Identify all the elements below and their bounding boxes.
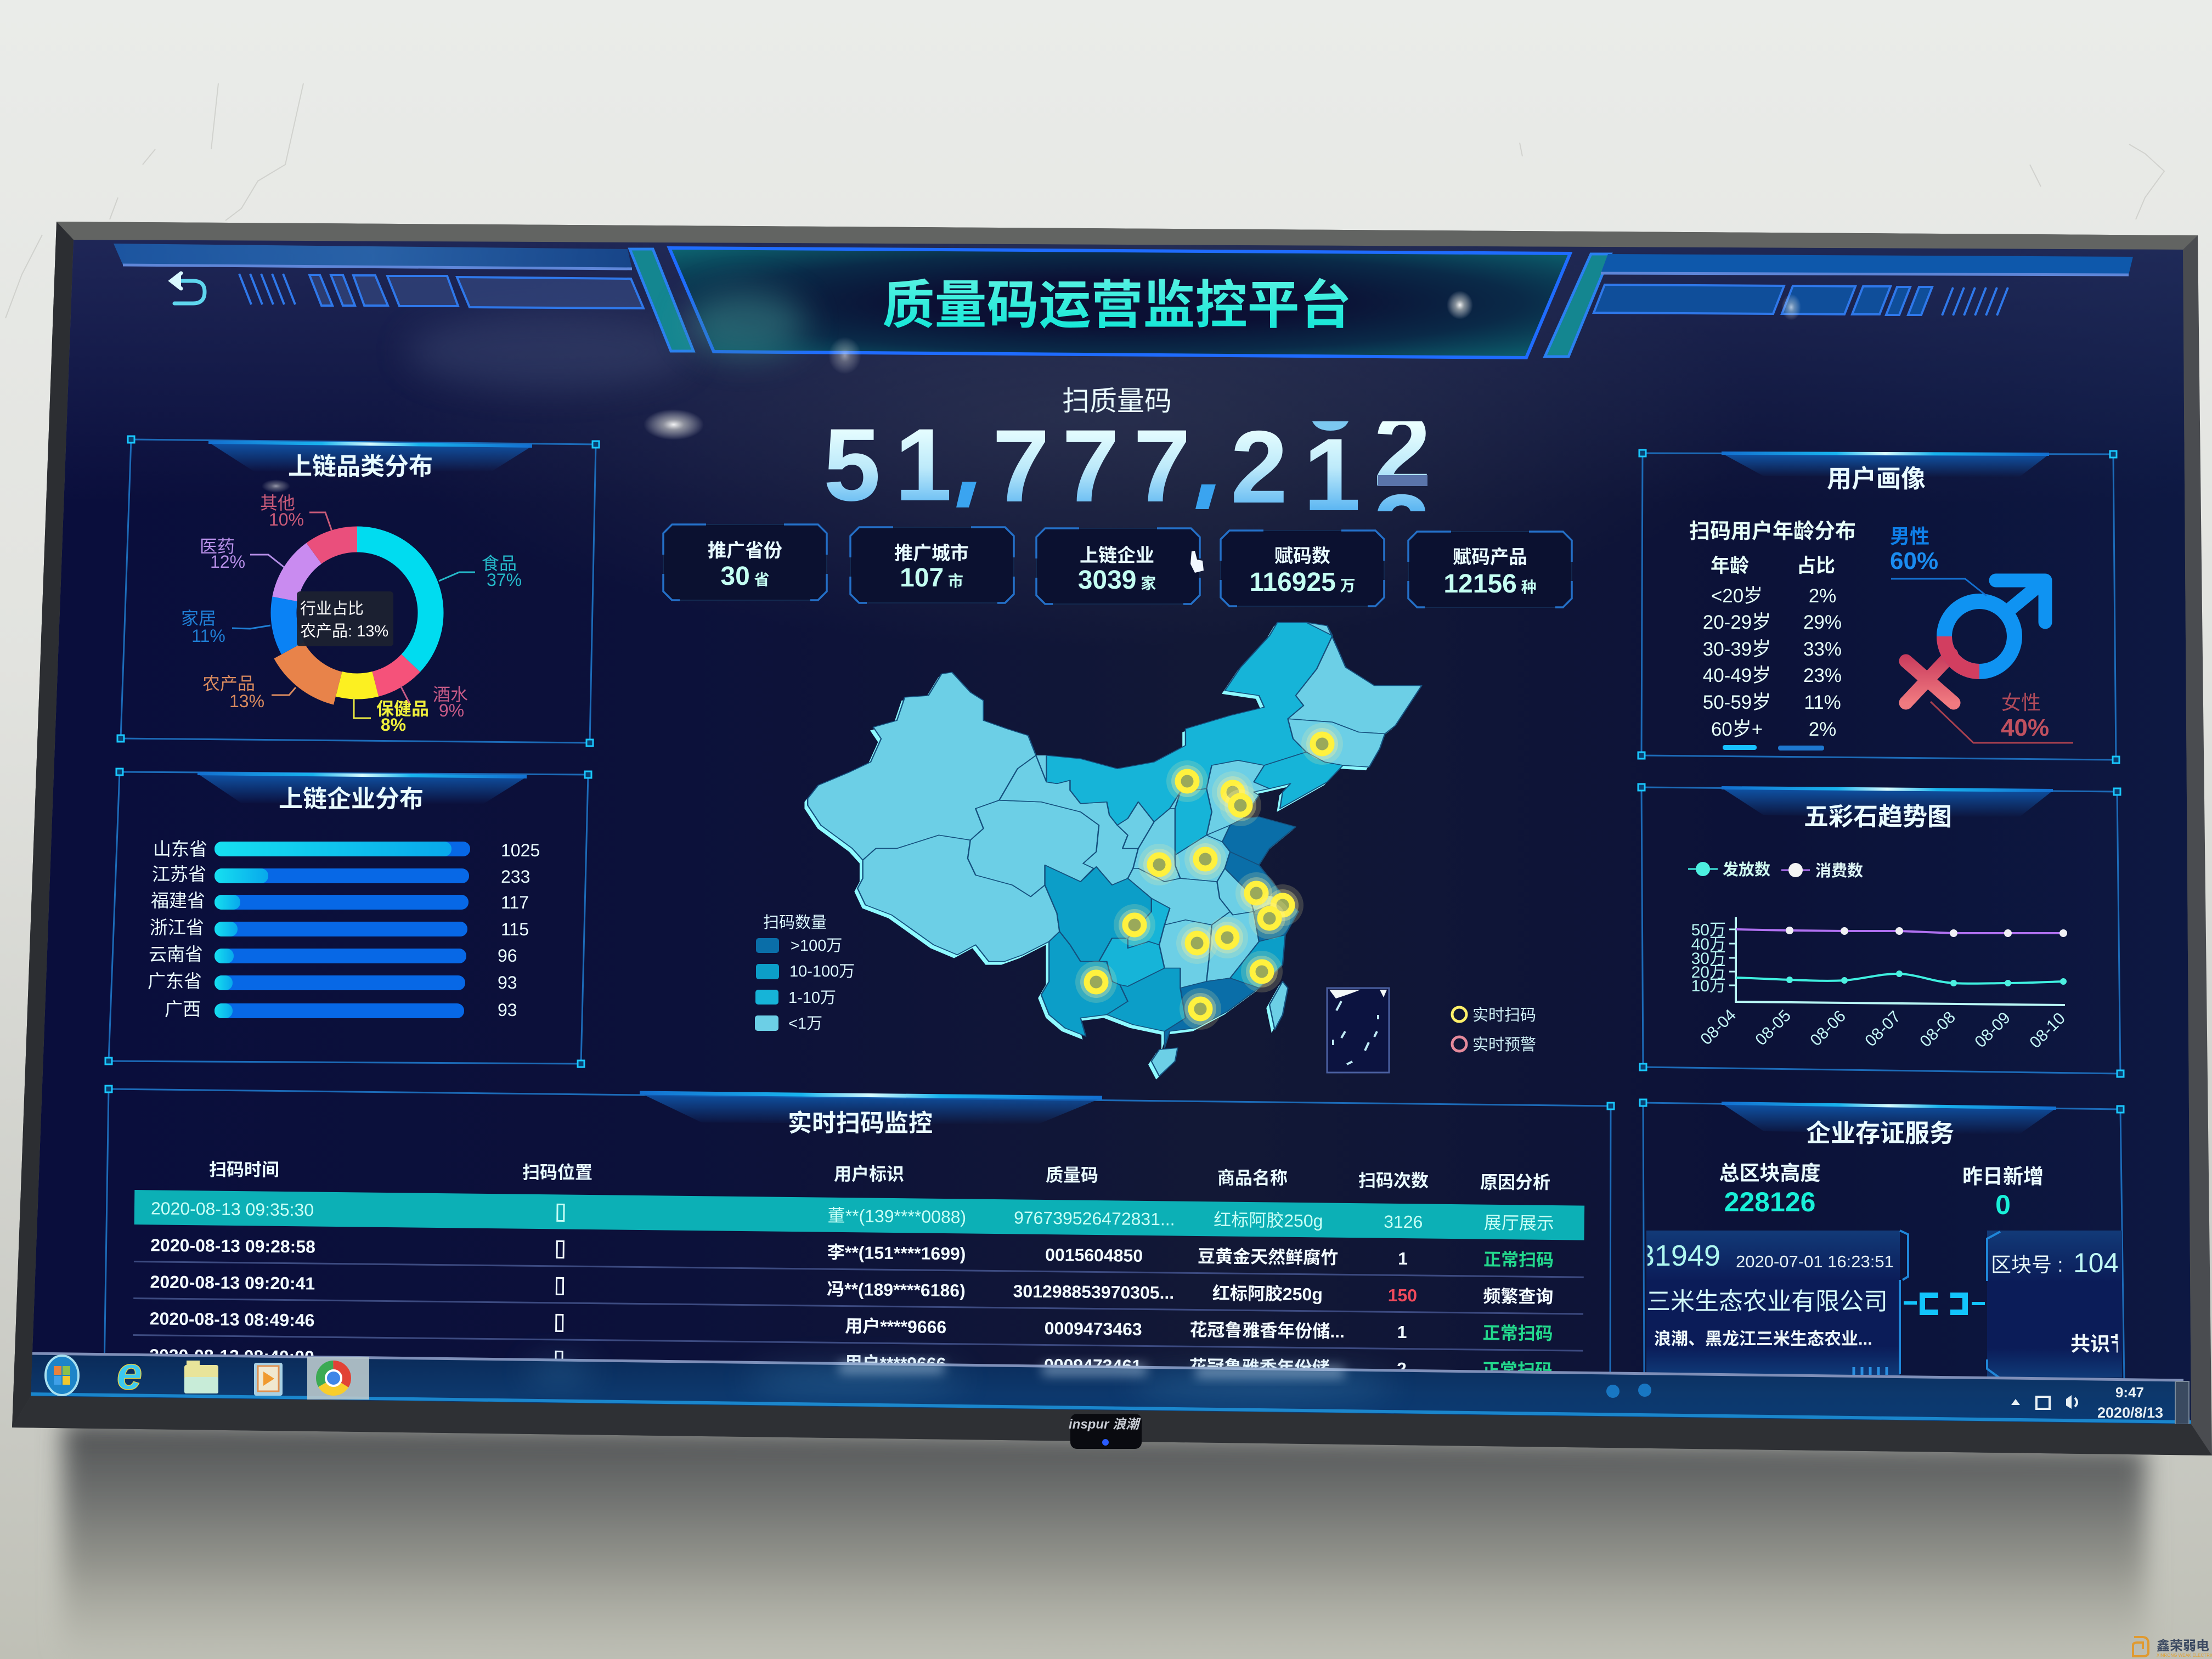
table header — [209, 1160, 1550, 1192]
table header: 原因分析 — [1480, 1172, 1550, 1192]
taskbar reflections — [527, 1364, 1393, 1395]
row 5: 用户****9666 — [844, 1353, 946, 1374]
main counter: 1 — [895, 407, 952, 522]
header left decorative slashes — [239, 274, 644, 308]
panel: trend chart — [1638, 784, 2124, 1077]
highlighted row — [134, 1190, 1584, 1240]
row 4: 正常扫码 — [1482, 1323, 1553, 1344]
panel: category distribution — [117, 436, 599, 746]
stat cards: 赋码数 — [1274, 546, 1330, 567]
chart legend: 发放数 — [1723, 861, 1770, 879]
row 3: 301298853970305... — [1013, 1281, 1174, 1303]
stat cards: 推广省份 — [708, 540, 782, 561]
stat cards — [663, 524, 1572, 607]
screen reflection — [406, 313, 691, 390]
title plate reflection — [686, 291, 806, 357]
line chart: 08-07 — [1861, 1008, 1904, 1050]
header left parallelogram — [630, 249, 693, 351]
table header: 质量码 — [1046, 1165, 1098, 1185]
line chart: 08-06 — [1807, 1007, 1849, 1049]
stats: 228126 — [1724, 1187, 1815, 1217]
row 2: 豆黄金天然鲜腐竹 — [1198, 1246, 1338, 1268]
line chart: 08-10 — [2026, 1009, 2069, 1052]
heading: 用户画像 — [1827, 465, 1926, 493]
donut chart — [279, 535, 435, 691]
stats — [1719, 1162, 2044, 1220]
gender labels: 男性 — [1890, 525, 1929, 548]
age table: 2% — [1809, 719, 1836, 740]
row 2: 2020-08-13 09:28:58 — [150, 1235, 315, 1257]
stats: 总区块高度 — [1719, 1162, 1820, 1184]
stat cards: 上链企业 — [1080, 545, 1154, 566]
stat cards: 3039 家 — [1078, 566, 1156, 595]
bar list: 福建省 — [151, 890, 205, 911]
age table: 50-59岁 — [1703, 692, 1771, 713]
donut tooltip: 农产品: 13% — [300, 622, 388, 640]
icon: media player — [254, 1363, 283, 1396]
icon: mouse cursor — [1190, 551, 1204, 573]
header right strip — [1601, 254, 2133, 275]
stats: 昨日新增 — [1962, 1165, 2044, 1188]
header right parallelogram — [1545, 254, 1611, 357]
main counter — [823, 392, 1431, 588]
age table: 20-29岁 — [1703, 612, 1771, 633]
chart legend: 消费数 — [1815, 862, 1863, 880]
line chart: 50万 — [1691, 921, 1726, 939]
map legend: >100万 — [791, 937, 842, 955]
age table: 2% — [1809, 585, 1836, 607]
main counter: 2 — [1374, 392, 1431, 507]
monitor shadow on wall — [63, 1421, 2146, 1659]
donut labels: 10% — [269, 510, 304, 529]
bar list: 云南省 — [149, 944, 203, 964]
age table: 23% — [1803, 665, 1842, 686]
row 5 — [149, 1345, 1553, 1380]
highlighted row: 红标阿胶250g — [1214, 1210, 1323, 1231]
map extruded edge — [804, 626, 1419, 1080]
line chart: 08-08 — [1916, 1008, 1959, 1051]
stats: 0 — [1995, 1189, 2011, 1220]
row 5: 2020-08-13 08:40:00 — [149, 1345, 314, 1367]
donut labels: 酒水 — [433, 685, 468, 704]
donut labels: 医药 — [200, 537, 235, 556]
main counter: 7 — [992, 408, 1049, 523]
row 5: 正常扫码 — [1482, 1360, 1553, 1380]
row 4: 2020-08-13 08:49:46 — [150, 1308, 315, 1330]
icon: browser: e — [117, 1347, 142, 1399]
age table: <20岁 — [1711, 585, 1763, 607]
system tray: 9:47 — [2115, 1384, 2144, 1401]
highlighted row: 2020-08-13 09:35:30 — [151, 1198, 314, 1220]
block card left: 2020-07-01 16:23:51 — [1736, 1252, 1894, 1271]
age table: 扫码用户年龄分布 — [1689, 520, 1856, 543]
donut labels: 13% — [229, 691, 264, 711]
main counter: 2 — [1231, 409, 1288, 524]
donut labels — [181, 493, 522, 735]
icon: back arrow — [171, 273, 205, 303]
monitor frame — [12, 222, 2212, 1455]
monitor logo badge — [1069, 1414, 1142, 1449]
row 3: 2020-08-13 09:20:41 — [150, 1272, 315, 1294]
block card right: 共识节点 — [2070, 1333, 2149, 1355]
age table: 40-49岁 — [1703, 665, 1771, 686]
heading: 上链企业分布 — [279, 786, 424, 812]
row 5: 花冠鲁雅香年份储... — [1189, 1357, 1344, 1378]
table header: 商品名称 — [1217, 1168, 1288, 1188]
row 2: 正常扫码 — [1483, 1250, 1554, 1270]
block card right — [1987, 1231, 2165, 1378]
map silhouette — [808, 623, 1421, 1048]
main counter: 7 — [1062, 408, 1119, 523]
map provinces — [808, 623, 1421, 1076]
screen — [27, 187, 2194, 1426]
bar list: 233 — [501, 867, 530, 887]
panel: blockchain evidence — [1574, 1099, 2165, 1383]
highlighted row: 976739526472831... — [1014, 1207, 1175, 1229]
main counter: 3 — [1374, 473, 1431, 588]
line chart: 10万 — [1691, 977, 1726, 995]
table header: 扫码位置 — [522, 1163, 592, 1182]
header left strip — [114, 244, 632, 269]
donut labels: 12% — [210, 552, 245, 572]
bar list: 浙江省 — [150, 917, 204, 938]
map legend: realtime: 实时扫码 — [1472, 1006, 1536, 1024]
map legend: 10-100万 — [789, 963, 855, 980]
line chart: 40万 — [1691, 935, 1726, 953]
heading: 五彩石趋势图 — [1804, 803, 1952, 831]
age table: 60岁+ — [1711, 719, 1763, 740]
map legend: 扫码数量 — [763, 913, 827, 932]
age table: 11% — [1804, 692, 1841, 713]
row 2: 0015604850 — [1045, 1245, 1143, 1266]
donut labels: 37% — [487, 570, 522, 590]
watermark: 鑫荣弱电 — [2157, 1638, 2209, 1654]
block card left — [1574, 1231, 1908, 1375]
age table — [1689, 520, 1856, 751]
header right decorative slashes — [1594, 285, 2008, 315]
line chart: 08-05 — [1752, 1007, 1795, 1049]
gender labels — [1890, 525, 2073, 743]
chart legend — [1688, 861, 1863, 880]
stat cards: 30 省 — [720, 562, 770, 591]
gender labels: 40% — [2001, 714, 2049, 741]
highlighted row: 董**(139****0088) — [827, 1206, 966, 1227]
panel: user profile — [1638, 450, 2119, 763]
map legend: realtime — [1452, 1006, 1536, 1054]
wall marks — [5, 83, 2164, 318]
age table: 30-39岁 — [1703, 639, 1771, 660]
icon: chain link — [1904, 1295, 1985, 1312]
system tray — [2011, 1381, 2189, 1424]
bar list: 117 — [501, 893, 529, 912]
icon: folder — [184, 1361, 218, 1393]
age table: 年龄 — [1711, 555, 1749, 577]
stat cards: 赋码产品 — [1453, 547, 1527, 568]
bar list: 山东省 — [153, 839, 207, 859]
row 2: 1 — [1398, 1249, 1408, 1268]
highlighted row: 展厅展示 — [1484, 1213, 1554, 1233]
china map — [804, 623, 1421, 1080]
bar list: 1025 — [501, 840, 540, 860]
donut labels: 11% — [191, 626, 225, 646]
bar list: 115 — [501, 919, 529, 939]
row 4: 0009473463 — [1045, 1318, 1142, 1339]
icon: chrome button — [307, 1357, 369, 1400]
age table: 29% — [1803, 612, 1842, 633]
bar list: 93 — [498, 973, 517, 992]
taskbar — [29, 1347, 2191, 1426]
gender symbol — [1906, 580, 2045, 703]
row 3: 红标阿胶250g — [1212, 1283, 1323, 1304]
highlighted row: 3126 — [1384, 1212, 1423, 1232]
heading: 上链品类分布 — [288, 453, 433, 480]
donut tooltip: 行业占比 — [300, 600, 364, 618]
age table: 33% — [1803, 639, 1842, 660]
main counter: 5 — [823, 407, 881, 522]
map markers — [1075, 723, 1343, 1030]
heading: 企业存证服务 — [1806, 1119, 1954, 1147]
donut labels: 9% — [439, 701, 464, 720]
heading: 实时扫码监控 — [788, 1110, 933, 1137]
map legend: realtime: 实时预警 — [1472, 1036, 1536, 1054]
donut labels: 8% — [381, 715, 406, 735]
screen glare spots — [262, 291, 1801, 493]
row 4 — [150, 1308, 1553, 1344]
main counter: 1 — [1304, 417, 1361, 532]
bar list: 96 — [498, 946, 517, 966]
panel: enterprise distribution — [105, 769, 591, 1067]
stat cards: 116925 万 — [1249, 568, 1356, 597]
row 4: 用户****9666 — [845, 1316, 946, 1337]
donut labels: 家居 — [181, 608, 216, 628]
block card left: 黑龙江三米生态农业有限公司 — [1574, 1288, 1888, 1315]
line chart: 30万 — [1691, 950, 1726, 968]
table header: 扫码时间 — [209, 1160, 279, 1180]
line chart — [1691, 917, 2069, 1052]
main counter heading: 扫质量码 — [1062, 386, 1172, 416]
donut tooltip — [297, 591, 393, 646]
title plate — [669, 248, 1570, 358]
donut labels: 其他 — [260, 493, 295, 513]
row 5: 2 — [1397, 1359, 1407, 1379]
gender labels: 60% — [1890, 548, 1938, 574]
map legend — [755, 913, 855, 1032]
donut labels: 保健品 — [376, 699, 429, 719]
stat cards: 12156 种 — [1443, 569, 1537, 599]
block card right: 104950 — [2073, 1248, 2165, 1278]
row 2: 李**(151****1699) — [827, 1243, 966, 1263]
row 3: 冯**(189****6186) — [827, 1279, 966, 1300]
donut labels: 农产品 — [202, 674, 255, 693]
gender labels: 女性 — [2001, 691, 2041, 714]
bar list: 广西 — [165, 999, 201, 1019]
south china sea inset — [1327, 988, 1389, 1073]
panel: realtime scan monitor — [104, 1086, 1614, 1383]
stat cards: 107 市 — [900, 563, 963, 592]
system tray: 2020/8/13 — [2097, 1404, 2163, 1421]
main counter: 7 — [1133, 408, 1190, 523]
row 2 — [150, 1235, 1554, 1270]
map legend: 1-10万 — [788, 989, 836, 1007]
table header: 扫码次数 — [1358, 1171, 1429, 1190]
line chart: 08-04 — [1697, 1006, 1740, 1048]
icon: start orb — [46, 1356, 78, 1395]
title: 质量码运营监控平台 — [882, 276, 1352, 335]
bar list: 93 — [498, 1000, 517, 1020]
donut labels: 食品 — [482, 554, 517, 573]
block card right: 区块号 : — [1991, 1254, 2063, 1276]
line chart: 08-09 — [1971, 1009, 2014, 1051]
stat cards: 推广城市 — [894, 543, 969, 564]
bar list: 广东省 — [148, 971, 202, 991]
row 3: 频繁查询 — [1483, 1286, 1554, 1307]
age table: 占比 — [1797, 555, 1835, 577]
bar list: 江苏省 — [152, 864, 206, 884]
block card left: 31949 — [1638, 1239, 1720, 1272]
row 4: 花冠鲁雅香年份储... — [1189, 1320, 1345, 1341]
row 3 — [150, 1272, 1554, 1307]
line chart: 20万 — [1691, 963, 1726, 981]
table header: 用户标识 — [834, 1164, 904, 1184]
map legend: <1万 — [788, 1015, 822, 1032]
watermark — [2133, 1637, 2212, 1658]
monitor logo badge: inspur 浪潮 — [1069, 1417, 1141, 1432]
row 5: 0009473461 — [1044, 1355, 1142, 1376]
bar list — [148, 839, 540, 1020]
block card left: 浪潮、黑龙江三米生态农业... — [1654, 1329, 1872, 1348]
row 4: 1 — [1397, 1322, 1407, 1342]
table body — [133, 1190, 1584, 1381]
row 3: 150 — [1388, 1285, 1417, 1305]
